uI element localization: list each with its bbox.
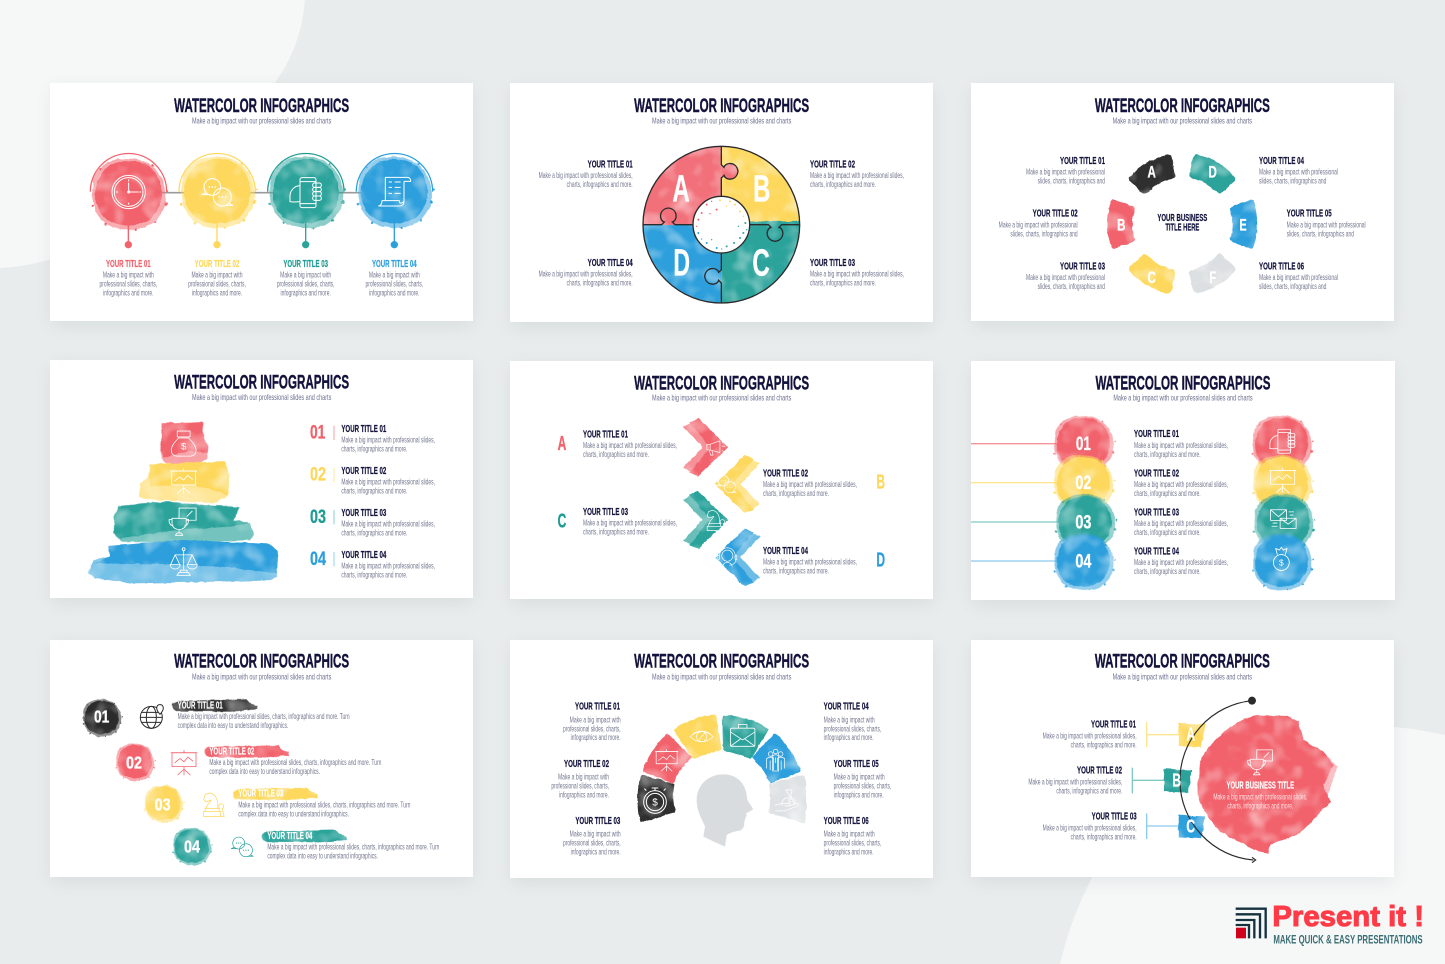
heading	[174, 372, 349, 402]
chevrons	[683, 419, 760, 586]
heading	[1095, 652, 1270, 681]
row 2: charts, infographics and more.	[341, 487, 407, 496]
item 1 text	[539, 159, 633, 189]
item A: A	[558, 432, 566, 455]
segment letters	[1117, 163, 1247, 287]
item A	[558, 429, 677, 459]
item 5 text: infographics and more.	[834, 790, 884, 799]
row 1 text: complex data into easy to understand infographics.	[178, 721, 288, 730]
item 4 text: Make a big impact with professional slides,	[539, 270, 633, 279]
heading: Make a big impact with our professional slides and charts	[1113, 115, 1252, 125]
panel 4: brush pyramid	[50, 360, 473, 598]
item 3 text: professional slides, charts,	[563, 839, 621, 848]
item 4 text: professional slides, charts,	[824, 724, 881, 733]
row 2	[310, 465, 435, 496]
item 2 text: Make a big impact with professional slides,	[1028, 778, 1122, 787]
item C: YOUR TITLE 03	[583, 507, 628, 518]
item D: YOUR TITLE 04	[763, 546, 808, 557]
connector brackets	[1132, 722, 1180, 839]
item 3 text: Make a big impact with professional slides,	[1043, 823, 1137, 832]
item 3 text: charts, infographics and more.	[1071, 832, 1137, 841]
item 5 text: Make a big impact with professional	[1287, 220, 1366, 229]
item 4 text: charts, infographics and more.	[1134, 567, 1201, 576]
item 1 text: YOUR TITLE 01	[1134, 429, 1179, 440]
blob numbers	[94, 706, 200, 857]
row 3 text: complex data into easy to understand infographics.	[238, 809, 349, 818]
segment letters: A	[1147, 163, 1156, 182]
item 4 text: YOUR TITLE 04	[824, 702, 869, 713]
row 4 text: complex data into easy to understand infographics.	[267, 852, 378, 861]
heading	[634, 373, 809, 403]
heading	[1095, 96, 1270, 125]
step 3 text: infographics and more.	[280, 288, 331, 297]
row 3: 03	[310, 507, 326, 528]
blob text: Make a big impact with professional slides,	[1213, 793, 1307, 802]
item 2 text	[1028, 766, 1122, 796]
blob text	[1213, 781, 1307, 810]
item 5 text: professional slides, charts,	[834, 781, 891, 790]
item 3 text: Make a big impact with professional slides,	[1134, 519, 1228, 528]
segment letters: B	[1117, 215, 1125, 234]
number blobs and title brushes	[82, 699, 347, 866]
heading	[634, 96, 809, 125]
centre title: YOUR BUSINESS	[1157, 213, 1208, 224]
item 1 text: Make a big impact with	[570, 715, 621, 724]
step 3 text: YOUR TITLE 03	[283, 259, 328, 270]
item 4 text	[1134, 546, 1228, 576]
item 3 text: YOUR TITLE 03	[1134, 507, 1179, 518]
item C: Make a big impact with professional slides,	[583, 519, 677, 528]
item 2 text: Make a big impact with professional	[999, 220, 1078, 229]
item D: D	[876, 548, 885, 571]
item 5 text: YOUR TITLE 05	[1287, 209, 1332, 220]
item A: Make a big impact with professional slides,	[583, 441, 677, 450]
item 6 text: Make a big impact with	[824, 830, 875, 839]
item 1 text	[563, 702, 621, 742]
step 4 text: Make a big impact with	[369, 271, 420, 280]
outer arcs and stems	[90, 153, 433, 248]
step 3 text: professional slides, charts,	[277, 280, 334, 289]
step 2 text: YOUR TITLE 02	[195, 259, 239, 270]
ring segments	[1111, 158, 1254, 290]
item 1 text: charts, infographics and more.	[1134, 450, 1201, 459]
item 2 text: Make a big impact with professional slides,	[810, 171, 904, 180]
circle numbers: 04	[1075, 551, 1092, 572]
item 1 text: professional slides, charts,	[563, 724, 621, 733]
heading: WATERCOLOR INFOGRAPHICS	[174, 96, 349, 117]
item C: charts, infographics and more.	[583, 528, 649, 537]
row 4: 04	[310, 549, 326, 570]
item 1 text: Make a big impact with professional slides,	[1134, 441, 1228, 450]
left and right circle stacks	[1053, 416, 1316, 591]
step 4 text	[365, 259, 423, 297]
item 3 text	[1026, 261, 1105, 291]
step 1 text: YOUR TITLE 01	[106, 259, 151, 270]
item A: charts, infographics and more.	[583, 450, 649, 459]
panel 8: head with arc segments	[510, 640, 933, 878]
blob numbers: 03	[155, 794, 171, 814]
heading: WATERCOLOR INFOGRAPHICS	[1095, 96, 1270, 117]
square letters	[1172, 724, 1195, 836]
item 3 text: Make a big impact with professional slides,	[810, 270, 904, 279]
item 6 text: infographics and more.	[824, 848, 874, 857]
item 2 text	[551, 759, 609, 799]
pyramid layers	[88, 422, 278, 583]
row 2 text: complex data into easy to understand infographics.	[209, 767, 320, 776]
chevron icons	[707, 440, 737, 567]
item 4 text: YOUR TITLE 04	[588, 258, 633, 269]
step 4 text: YOUR TITLE 04	[372, 259, 417, 270]
step 3 text: Make a big impact with	[280, 271, 331, 280]
item 2 text: YOUR TITLE 02	[810, 159, 855, 170]
row 3: charts, infographics and more.	[341, 529, 407, 538]
item 1 text: Make a big impact with professional slides,	[539, 171, 633, 180]
item 3 text: charts, infographics and more.	[1134, 528, 1201, 537]
centre title: TITLE HERE	[1165, 223, 1200, 234]
item 2 text: Make a big impact with	[558, 772, 609, 781]
step 2 text: Make a big impact with	[191, 271, 242, 280]
row 1: YOUR TITLE 01	[341, 424, 387, 435]
heading: WATERCOLOR INFOGRAPHICS	[174, 652, 349, 673]
item 3 text: Make a big impact with	[570, 830, 621, 839]
item 2 text: infographics and more.	[559, 790, 609, 799]
item 3 text: YOUR TITLE 03	[575, 816, 621, 827]
row 4 text	[267, 831, 439, 861]
step 1 text: Make a big impact with	[103, 271, 154, 280]
item 6 text	[1259, 261, 1338, 291]
heading: Make a big impact with our professional slides and charts	[1113, 671, 1252, 681]
item 2 text: charts, infographics and more.	[810, 180, 876, 189]
row 2: 02	[310, 465, 326, 486]
item 2 text: Make a big impact with professional slides,	[1134, 480, 1228, 489]
item 1 text: YOUR TITLE 01	[1091, 720, 1136, 731]
row 1: 01	[310, 423, 326, 444]
item 6 text: YOUR TITLE 06	[1259, 261, 1304, 272]
step 1 text: professional slides, charts,	[99, 280, 157, 289]
item B: YOUR TITLE 02	[763, 468, 808, 479]
row 1: Make a big impact with professional slides,	[341, 436, 435, 445]
row 3	[310, 507, 435, 538]
row 4 text: YOUR TITLE 04	[267, 831, 313, 842]
quadrant letters	[672, 167, 770, 285]
row 2 text	[209, 746, 381, 776]
row 4: YOUR TITLE 04	[341, 550, 387, 561]
segment icons	[644, 724, 798, 813]
item 3 text	[1043, 811, 1137, 841]
item 3 text	[810, 258, 904, 288]
logo mark	[1236, 909, 1266, 938]
item 2 text: professional slides, charts,	[551, 781, 609, 790]
centre circle with confetti	[693, 196, 750, 253]
logo: Present it	[1236, 901, 1424, 947]
circle numbers: 03	[1075, 512, 1092, 533]
heading: Make a big impact with our professional slides and charts	[1113, 393, 1253, 403]
item 6 text: professional slides, charts,	[824, 839, 881, 848]
item 4 text	[1259, 156, 1338, 186]
circle numbers	[1075, 434, 1092, 572]
item 3 text: charts, infographics and more.	[810, 279, 876, 288]
item 4 text: slides, charts, infographics and	[1259, 177, 1327, 186]
row 4 text: Make a big impact with professional slides, charts, infographics and more. Turn	[267, 843, 439, 852]
item A: YOUR TITLE 01	[583, 429, 628, 440]
row 4	[310, 549, 435, 580]
logo wordmark: Present it !	[1272, 901, 1424, 933]
row 3 text: Make a big impact with professional slides, charts, infographics and more. Turn	[238, 800, 410, 809]
item B: charts, infographics and more.	[763, 489, 829, 498]
blob numbers: 01	[94, 706, 109, 726]
item 2 text: charts, infographics and more.	[1056, 787, 1122, 796]
item 3 text	[563, 816, 621, 857]
item 2 text: YOUR TITLE 02	[1134, 468, 1179, 479]
item 1 text	[1134, 429, 1228, 459]
heading	[174, 96, 349, 125]
item 2 text: YOUR TITLE 02	[1077, 766, 1122, 777]
item 4 text: YOUR TITLE 04	[1134, 546, 1179, 557]
head silhouette	[697, 774, 753, 847]
panel 6: stacked circles	[971, 361, 1395, 600]
item 5 text: Make a big impact with	[834, 772, 885, 781]
heading: WATERCOLOR INFOGRAPHICS	[634, 652, 809, 673]
item 6 text: Make a big impact with professional	[1259, 273, 1338, 282]
blob text: charts, infographics and more.	[1227, 801, 1293, 810]
heading	[1095, 373, 1271, 403]
item 4 text: Make a big impact with	[824, 715, 875, 724]
dark arc with dot and arrow	[1180, 697, 1256, 863]
item 5 text	[1287, 209, 1366, 238]
row 3 text: YOUR TITLE 03	[238, 789, 284, 800]
connector line	[160, 190, 362, 195]
panel 9: big blob with arc	[971, 640, 1394, 877]
item 5 text: YOUR TITLE 05	[834, 759, 879, 770]
item 3 text	[1134, 507, 1228, 537]
item 1 text: YOUR TITLE 01	[575, 702, 620, 713]
item 1 text	[1026, 156, 1105, 186]
blob numbers: 04	[184, 837, 200, 857]
row 1 text: YOUR TITLE 01	[178, 700, 223, 711]
row 4: charts, infographics and more.	[341, 571, 407, 580]
item B: Make a big impact with professional slides,	[763, 480, 857, 489]
item 1 text: infographics and more.	[571, 733, 621, 742]
item 4 text: charts, infographics and more.	[567, 279, 633, 288]
item B	[763, 468, 885, 498]
item 2 text: YOUR TITLE 02	[1033, 209, 1078, 220]
row 2 text: Make a big impact with professional slides, charts, infographics and more. Turn	[209, 758, 381, 767]
step 4 text: professional slides, charts,	[365, 280, 423, 289]
item D	[763, 546, 885, 576]
item 1 text: slides, charts, infographics and	[1038, 177, 1105, 186]
heading: WATERCOLOR INFOGRAPHICS	[634, 373, 809, 394]
item 2 text	[810, 159, 904, 189]
quadrant letters: A	[672, 167, 690, 210]
panel 5: brush chevrons	[510, 361, 933, 599]
blob numbers: 02	[126, 752, 142, 772]
item 1 text: Make a big impact with professional	[1026, 168, 1105, 177]
row 4: Make a big impact with professional slides,	[341, 562, 435, 571]
item 6 text	[824, 816, 881, 857]
item 4 text: YOUR TITLE 04	[1259, 156, 1304, 167]
heading: Make a big impact with our professional slides and charts	[652, 115, 792, 125]
square letters: B	[1172, 770, 1181, 791]
heading	[174, 652, 349, 681]
item 4 text	[824, 702, 881, 742]
item C	[558, 507, 677, 537]
segment letters: C	[1147, 268, 1156, 287]
centre title	[1157, 213, 1208, 234]
heading: WATERCOLOR INFOGRAPHICS	[174, 372, 349, 393]
heading: Make a big impact with our professional slides and charts	[192, 671, 332, 681]
item 1 text: charts, infographics and more.	[567, 180, 633, 189]
row 1 text	[178, 700, 350, 730]
blob icon	[1248, 750, 1272, 775]
pyramid icons	[169, 431, 197, 575]
puzzle quadrants	[643, 146, 800, 303]
row 2: Make a big impact with professional slides,	[341, 478, 435, 487]
item 1 text: charts, infographics and more.	[1071, 741, 1137, 750]
quadrant letters: D	[673, 242, 690, 285]
row 2: YOUR TITLE 02	[341, 466, 386, 477]
blob text: YOUR BUSINESS TITLE	[1226, 781, 1295, 792]
item 2 text: slides, charts, infographics and	[1010, 229, 1078, 238]
panel 7: staggered list	[50, 640, 473, 877]
item 6 text: YOUR TITLE 06	[824, 816, 869, 827]
panel 1: four circle timeline	[50, 83, 473, 321]
row 1: charts, infographics and more.	[341, 445, 407, 454]
quadrant letters: C	[752, 242, 770, 285]
item D: charts, infographics and more.	[763, 567, 829, 576]
segment letters: F	[1209, 268, 1216, 287]
row 1	[310, 423, 435, 454]
item 3 text: YOUR TITLE 03	[1092, 811, 1137, 822]
item 1 text: Make a big impact with professional slides,	[1043, 732, 1137, 741]
circle numbers: 02	[1075, 473, 1091, 494]
heading	[634, 652, 809, 681]
item 2 text	[999, 209, 1078, 238]
heading: WATERCOLOR INFOGRAPHICS	[1095, 652, 1270, 673]
heading: Make a big impact with our professional slides and charts	[192, 392, 332, 402]
heading: Make a big impact with our professional slides and charts	[652, 671, 792, 681]
item 4 text: Make a big impact with professional slides,	[1134, 558, 1228, 567]
item 2 text	[1134, 468, 1228, 498]
item 4 text: Make a big impact with professional	[1259, 168, 1338, 177]
row icons	[140, 705, 253, 857]
heading: WATERCOLOR INFOGRAPHICS	[1095, 373, 1271, 394]
heading: Make a big impact with our professional slides and charts	[652, 393, 792, 403]
quadrant letters: B	[753, 167, 770, 210]
panel 3: six segment ring	[971, 83, 1394, 321]
step 3 text	[277, 259, 334, 297]
item 3 text: slides, charts, infographics and	[1038, 282, 1105, 291]
icons: clock, chat, hand with phone, scroll	[112, 175, 411, 209]
puzzle outline	[643, 146, 800, 303]
arc segments	[639, 717, 805, 821]
circle numbers: 01	[1076, 434, 1091, 455]
item 2 text: charts, infographics and more.	[1134, 489, 1201, 498]
row 3: Make a big impact with professional slides,	[341, 520, 435, 529]
item 4 text	[539, 258, 633, 288]
item 3 text: YOUR TITLE 03	[810, 258, 855, 269]
step 2 text	[188, 259, 246, 297]
item D: Make a big impact with professional slides,	[763, 558, 857, 567]
row 3 text	[238, 789, 410, 818]
step 4 text: infographics and more.	[369, 288, 419, 297]
item 1 text: YOUR TITLE 01	[1060, 156, 1105, 167]
square letters: C	[1186, 815, 1195, 836]
step 2 text: infographics and more.	[192, 288, 242, 297]
step 1 text	[99, 259, 157, 297]
panel 2: puzzle ring	[510, 83, 933, 322]
row 1 text: Make a big impact with professional slides, charts, infographics and more. Turn	[178, 712, 350, 721]
segment letters: D	[1208, 163, 1217, 182]
item 3 text: Make a big impact with professional	[1026, 273, 1105, 282]
item 1 text	[1043, 720, 1137, 750]
item B: B	[876, 471, 885, 494]
step 1 text: infographics and more.	[103, 288, 153, 297]
right icons	[1269, 429, 1296, 570]
item 5 text: slides, charts, infographics and	[1287, 229, 1354, 238]
item 4 text: infographics and more.	[824, 733, 874, 742]
segment letters: E	[1239, 215, 1247, 234]
watercolor circles	[91, 157, 435, 231]
item 1 text: YOUR TITLE 01	[588, 159, 633, 170]
square letters: A	[1186, 724, 1195, 745]
heading: WATERCOLOR INFOGRAPHICS	[634, 96, 809, 117]
big watercolor blob and letter squares	[1164, 715, 1338, 853]
row 2 text: YOUR TITLE 02	[209, 746, 254, 757]
item 5 text	[834, 759, 891, 799]
item 6 text: slides, charts, infographics and	[1259, 282, 1327, 291]
heading: Make a big impact with our professional slides and charts	[192, 115, 332, 125]
item C: C	[558, 510, 566, 533]
coloured lead lines	[971, 444, 1060, 561]
item 3 text: infographics and more.	[571, 848, 621, 857]
item 3 text: YOUR TITLE 03	[1060, 261, 1105, 272]
step 2 text: professional slides, charts,	[188, 280, 246, 289]
row 3: YOUR TITLE 03	[341, 508, 387, 519]
item 2 text: YOUR TITLE 02	[564, 759, 609, 770]
